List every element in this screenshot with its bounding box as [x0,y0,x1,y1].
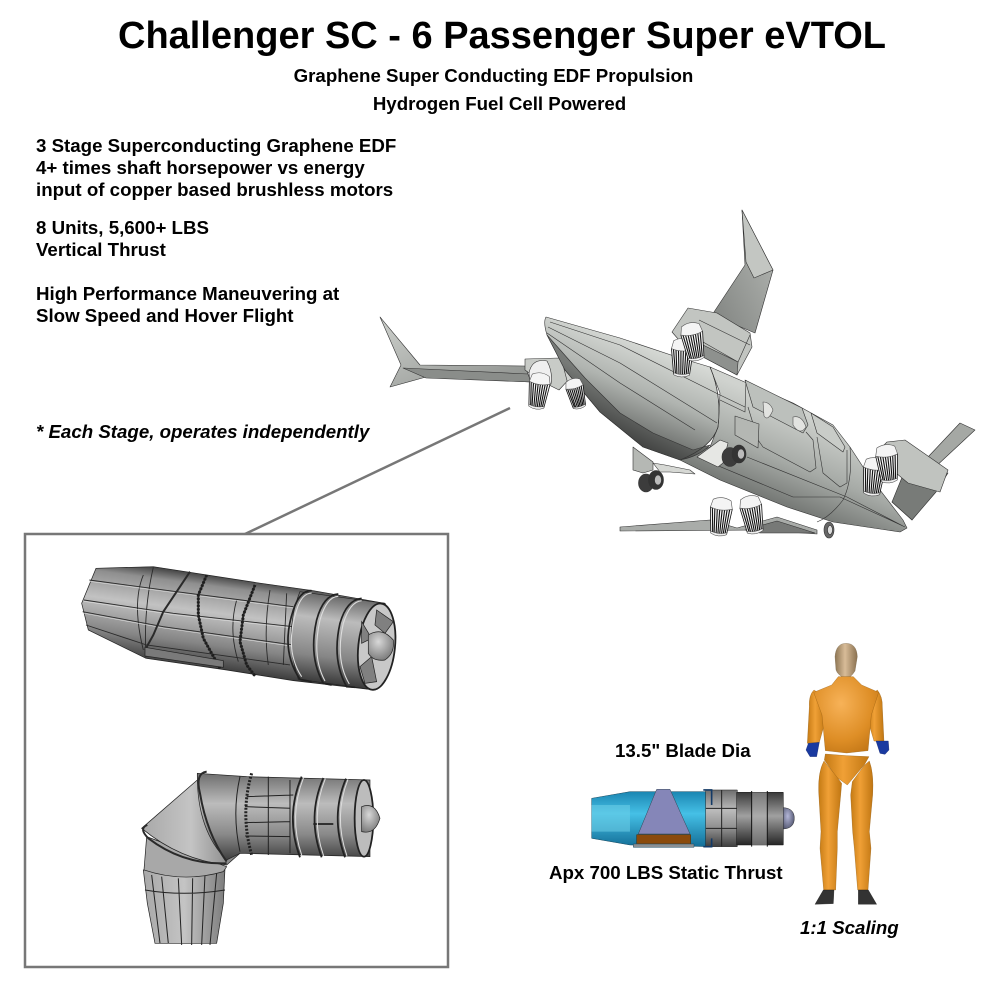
blue nozzle [592,792,708,847]
illustration: human figure for scale [806,643,889,904]
EDF rib highlights [83,581,293,646]
text block: EDF efficiency: input of copper based brushless motors [36,179,393,200]
aircraft tail wheel [824,522,834,538]
figure feet [815,890,877,904]
figure torso [814,677,879,753]
text block: EDF efficiency: 4+ times shaft horsepower vs energy [36,157,365,178]
hub [783,808,794,829]
elbow upper duct [197,773,370,860]
EDF rings [288,591,362,687]
engine cup 1 [670,338,694,377]
EDF ring highlights [291,593,362,684]
text block: maneuvering: Slow Speed and Hover Flight [36,305,294,326]
text block: vertical thrust: 8 Units, 5,600+ LBS [36,217,209,238]
aircraft rear engine mounts [525,358,583,400]
EDF mounting straps [145,572,255,676]
illustration: elbow EDF unit [142,772,380,945]
figure right hand [876,741,889,754]
note: independent stages: * Each Stage, operates independently [36,421,369,442]
text block: maneuvering [36,283,339,326]
figure left arm [807,690,826,743]
brown battery [637,835,691,844]
text block: maneuvering: High Performance Maneuvering at [36,283,339,304]
panel: EDF detail box [25,534,448,967]
engine cup 7 [707,496,733,537]
engine cup 4 [564,377,588,411]
aircraft fuselage front section [545,317,719,460]
EDF nozzle and body [82,567,393,690]
purple frame [638,789,690,834]
illustration: aircraft [380,210,975,538]
elbow mid section struts [236,777,293,855]
EDF ribs [83,567,293,665]
engine cup 3 [526,371,551,411]
grey frame section [703,790,737,847]
lighter panel [592,805,630,832]
elbow strap bolts [246,773,252,855]
elbow flange rings [143,772,227,863]
elbow lower bend [144,837,227,877]
subtitle line 2: Hydrogen Fuel Cell Powered [373,93,626,114]
elbow lower nozzle [143,868,225,945]
aircraft right tail [892,423,975,520]
aircraft upper engine pod [672,308,752,375]
figure left hand [806,742,819,757]
text block: vertical thrust [36,217,209,260]
figure head [835,643,857,678]
aircraft landing gear strut [633,447,695,474]
subtitle line 1: Graphene Super Conducting EDF Propulsion [294,65,693,86]
EDF tube [145,647,223,667]
text block: EDF efficiency: 3 Stage Superconducting Graphene EDF [36,135,396,156]
title: Challenger SC - 6 Passenger Super eVTOL [118,15,886,57]
figure pelvis [824,754,869,785]
EDF strap bolts [198,575,255,676]
elbow fan front and hub [355,780,380,857]
EDF drum sections [291,592,393,690]
label: static thrust: Apx 700 LBS Static Thrust [549,862,783,883]
engine cup 6 [875,443,901,484]
aircraft lower wing [620,517,817,534]
aircraft fuselage rear section [680,367,907,532]
aircraft right engine pod [877,440,948,492]
elbow ring highlights [296,777,348,856]
aircraft surface lines [547,322,905,527]
grey base [633,844,694,847]
aircraft canopy [745,380,845,452]
figure right arm [867,690,884,742]
label: scaling: 1:1 Scaling [800,917,899,938]
elbow angled section [142,780,240,865]
illustration: straight EDF unit [82,567,399,692]
aircraft fuselage underside shadow [547,335,710,460]
engine cup 8 [738,494,766,536]
aircraft doors [748,407,847,487]
aircraft rear wheel [638,470,664,492]
engine cup 5 [860,456,886,497]
elbow rings [293,777,346,857]
text block: vertical thrust: Vertical Thrust [36,239,166,260]
aircraft rear stabilizer [380,317,531,387]
aircraft gear door and wheel [697,416,759,467]
figure right leg [851,761,873,890]
figure left leg [819,761,842,890]
dark drum [737,791,783,847]
leader line from aircraft to detail panel [245,408,510,534]
text block: EDF efficiency [36,135,396,200]
engine cup 2 [679,321,707,363]
aircraft upper wing [712,210,773,333]
EDF fan intake [354,602,399,692]
label: blade diameter: 13.5" Blade Dia [615,740,751,761]
illustration: coloured EDF scale model [592,789,794,847]
